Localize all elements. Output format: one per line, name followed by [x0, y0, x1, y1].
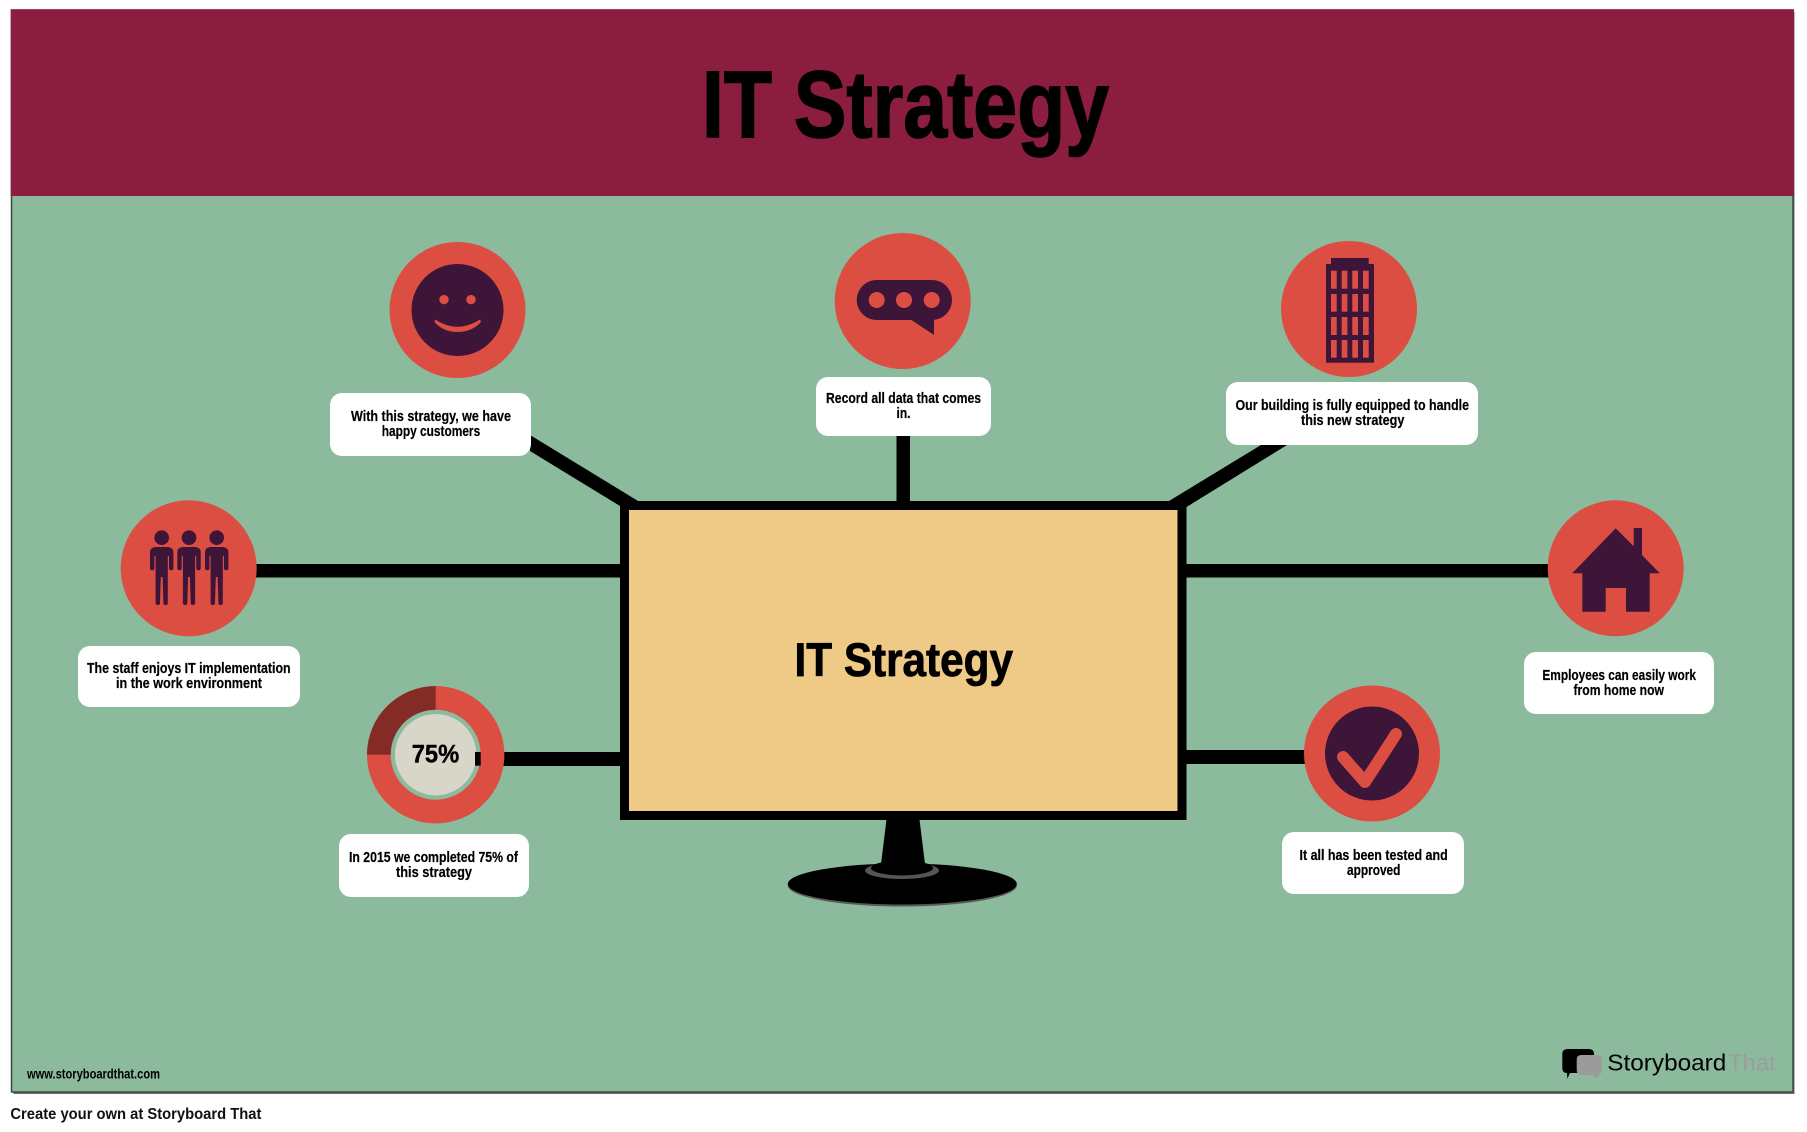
screen title: IT Strategy — [794, 633, 1013, 686]
callout: work from home: from home now — [1574, 683, 1665, 699]
logo: Storyboard That — [1562, 1049, 1776, 1079]
callout: happy customers: happy customers — [382, 424, 480, 440]
callout: building equipped: this new strategy — [1301, 413, 1404, 429]
icon: chat bubble — [835, 233, 971, 369]
title: IT Strategy — [702, 52, 1109, 158]
callout: record data — [816, 377, 991, 436]
callout: staff: in the work environment — [116, 676, 262, 692]
donut value: 75% — [412, 741, 459, 769]
callout: staff: The staff enjoys IT implementation — [87, 661, 291, 677]
donut chart: 75% — [367, 686, 504, 823]
website url: www.storyboardthat.com — [26, 1067, 160, 1082]
callout: tested and approved: approved — [1347, 863, 1400, 879]
logo: Storyboard That: That — [1728, 1050, 1776, 1076]
callout: tested and approved — [1282, 832, 1464, 894]
callout: work from home: Employees can easily work — [1542, 668, 1697, 684]
callout: happy customers — [330, 393, 531, 456]
icon: three staff members — [121, 500, 257, 636]
callout: record data: in. — [896, 406, 910, 422]
monitor stand — [788, 818, 1017, 906]
icon: office building — [1281, 241, 1417, 377]
icon: house — [1548, 500, 1684, 636]
monitor screen — [624, 506, 1182, 816]
callout: 2015 completion: this strategy — [396, 865, 472, 881]
monitor — [624, 506, 1182, 906]
callout: building equipped: Our building is fully equipped to handle — [1236, 398, 1469, 414]
callout: work from home — [1524, 652, 1714, 714]
logo: Storyboard That: Storyboard — [1607, 1050, 1726, 1076]
footer credit: Create your own at Storyboard That — [10, 1106, 262, 1123]
connector lines — [250, 430, 1554, 766]
callout: 2015 completion — [339, 834, 529, 897]
callout: tested and approved: It all has been tested and — [1300, 848, 1448, 864]
icon: check mark — [1304, 686, 1440, 822]
callout: 2015 completion: In 2015 we completed 75% of — [349, 850, 518, 866]
header band — [11, 9, 1794, 196]
icon: smiley face — [390, 242, 526, 378]
callout: happy customers: With this strategy, we have — [351, 409, 511, 425]
callout: staff — [78, 646, 300, 707]
callout: building equipped — [1226, 382, 1478, 445]
callout: record data: Record all data that comes — [826, 391, 981, 407]
